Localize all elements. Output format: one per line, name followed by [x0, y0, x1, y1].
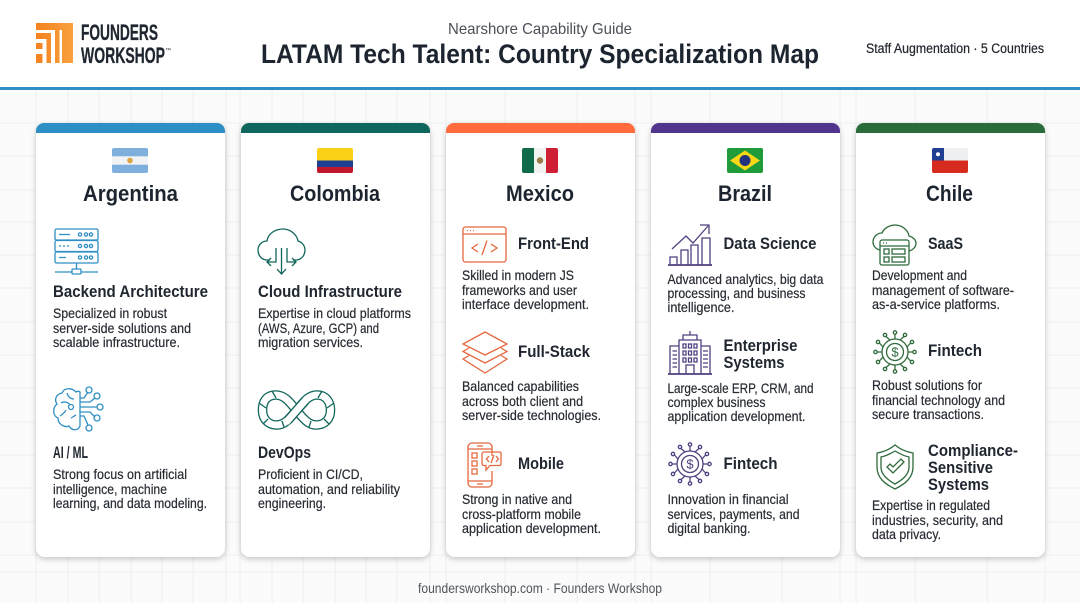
item: SaaS description: as-a-service platforms. — [872, 297, 1000, 312]
item: Cloud Infrastructure: Cloud Infrastructure — [258, 282, 402, 301]
item: Front-End heading: Front-End — [518, 234, 589, 253]
item: Cloud Infrastructure: Expertise in cloud platforms — [258, 306, 411, 321]
item: Fintech description: financial technology and — [872, 393, 1005, 408]
icon: layers — [463, 332, 507, 373]
item: Enterprise Systems description: Large-scale ERP, CRM, and — [668, 381, 814, 396]
item: Compliance description — [872, 498, 1003, 542]
flag: Argentina — [112, 148, 148, 173]
item: Enterprise Systems description — [668, 381, 814, 424]
item: SaaS description: Development and — [872, 268, 967, 283]
card top bar — [36, 123, 225, 133]
item: SaaS heading: SaaS — [928, 234, 963, 253]
logo — [36, 20, 171, 68]
panel: Chile — [856, 123, 1045, 557]
item: AI / ML — [53, 443, 207, 511]
item: Fintech description: Robust solutions for — [872, 378, 982, 393]
country name: Mexico — [506, 181, 574, 206]
item: Front-End description: frameworks and user — [462, 283, 577, 298]
logo wordmark: WORKSHOP — [81, 43, 165, 68]
icon: brain circuit — [54, 387, 103, 431]
item: AI / ML: intelligence, machine — [53, 482, 167, 497]
card top bar — [446, 123, 635, 133]
item: Backend Architecture: scalable infrastructure. — [53, 335, 180, 350]
flag: Brazil — [727, 148, 763, 173]
logo mark — [36, 23, 73, 63]
item: Backend Architecture: Backend Architecture — [53, 282, 208, 301]
eyebrow: Nearshore Capability Guide — [448, 21, 632, 38]
item: Fintech heading: Fintech — [724, 454, 778, 473]
item: Enterprise Systems heading: Enterprise — [724, 336, 798, 355]
item: Cloud Infrastructure: (AWS, Azure, GCP) and — [258, 321, 379, 336]
flag: Mexico — [522, 148, 558, 173]
item: Compliance description: data privacy. — [872, 527, 941, 542]
item: Mobile description: cross-platform mobile — [462, 507, 581, 522]
item: Fintech description: services, payments, and — [668, 507, 800, 522]
card body — [856, 123, 1045, 557]
item: Compliance-Sensitive Systems heading: Systems — [928, 475, 989, 494]
country name: Brazil — [718, 181, 772, 206]
item: AI / ML: Strong focus on artificial — [53, 467, 187, 482]
item: SaaS description: management of software- — [872, 283, 1014, 298]
icon: mobile code — [468, 443, 501, 487]
item: Front-End description: interface development. — [462, 297, 589, 312]
item: Compliance-Sensitive Systems heading: Sensitive — [928, 458, 993, 477]
item: Cloud Infrastructure: migration services. — [258, 335, 363, 350]
item: SaaS description — [872, 268, 1014, 312]
card body — [36, 123, 225, 557]
card body — [241, 123, 430, 557]
item: Full-Stack description: server-side technologies. — [462, 408, 601, 423]
item: Full-Stack description: Balanced capabilities — [462, 379, 579, 394]
item: Fintech heading: Fintech — [928, 341, 982, 360]
icon: shield check — [877, 445, 913, 489]
subtitle right: Staff Augmentation · 5 Countries — [866, 41, 1044, 56]
item: Data Science description: Advanced analytics, big data — [668, 272, 824, 287]
item: Fintech description: Innovation in financial — [668, 492, 788, 507]
logo wordmark: ™ — [165, 47, 171, 54]
card top bar — [241, 123, 430, 133]
icon: fintech coin network: $ — [891, 344, 899, 360]
item: Compliance-Sensitive Systems heading — [928, 441, 1018, 494]
item: Backend Architecture: Specialized in robust — [53, 306, 167, 321]
item: DevOps: engineering. — [258, 496, 326, 511]
icon: fintech coin network — [874, 331, 916, 373]
item: Mobile description: application development. — [462, 521, 601, 536]
item: Full-Stack description: across both client and — [462, 394, 583, 409]
item: Data Science description: intelligence. — [668, 300, 734, 315]
flag: Colombia — [317, 148, 353, 173]
item: DevOps — [258, 443, 400, 511]
icon: office buildings — [668, 331, 712, 374]
item: Fintech description: secure transactions. — [872, 407, 984, 422]
item: Backend Architecture: server-side solutions and — [53, 321, 191, 336]
item: Front-End description — [462, 268, 589, 312]
icon: fintech coin network: $ — [686, 456, 694, 472]
item: AI / ML: learning, and data modeling. — [53, 496, 207, 511]
item: Mobile heading: Mobile — [518, 454, 564, 473]
header bar — [0, 0, 1080, 87]
item: AI / ML: AI / ML — [53, 443, 88, 462]
item: Fintech description — [668, 492, 800, 536]
icon: bar chart arrow — [668, 225, 712, 265]
title: LATAM Tech Talent: Country Specialization Map — [261, 39, 819, 69]
item: Fintech description: digital banking. — [668, 521, 750, 536]
card body — [446, 123, 635, 557]
item: DevOps: automation, and reliability — [258, 482, 400, 497]
item: Enterprise Systems heading: Systems — [724, 353, 784, 372]
flag: Chile — [932, 148, 968, 173]
country name: Chile — [926, 181, 973, 206]
item: DevOps: Proficient in CI/CD, — [258, 467, 363, 482]
panel: Mexico — [446, 123, 635, 557]
country name: Colombia — [290, 181, 381, 206]
item: Enterprise Systems description: application development. — [668, 409, 806, 424]
item: Compliance-Sensitive Systems heading: Compliance- — [928, 441, 1018, 460]
icon: fintech coin network — [669, 443, 711, 485]
item: Data Science description — [668, 272, 824, 315]
icon: browser code — [463, 227, 506, 262]
panel: Argentina — [36, 123, 225, 557]
item: Mobile description: Strong in native and — [462, 492, 572, 507]
item: Full-Stack description — [462, 379, 601, 423]
item: Compliance description: Expertise in regulated — [872, 498, 990, 513]
panel: Colombia — [241, 123, 430, 557]
icon: SaaS cloud window — [873, 225, 916, 265]
item: Mobile description — [462, 492, 601, 536]
item: Compliance description: industries, security, and — [872, 513, 1003, 528]
logo wordmark — [81, 20, 171, 68]
footer: foundersworkshop.com · Founders Workshop — [418, 580, 662, 596]
header rule — [0, 87, 1080, 90]
icon: cloud arrows — [258, 229, 305, 274]
item: Fintech description — [872, 378, 1005, 422]
panel: Brazil — [651, 123, 840, 557]
icon: devops infinity — [259, 391, 334, 427]
card top bar — [651, 123, 840, 133]
icon: server — [55, 229, 98, 274]
item: Cloud Infrastructure — [258, 282, 411, 350]
item: Data Science description: processing, and business — [668, 286, 806, 301]
logo wordmark: FOUNDERS — [81, 20, 158, 45]
item: Enterprise Systems heading — [724, 336, 798, 372]
country name: Argentina — [83, 181, 179, 206]
card body — [651, 123, 840, 557]
item: Front-End description: Skilled in modern JS — [462, 268, 574, 283]
item: Backend Architecture — [53, 282, 208, 350]
item: Enterprise Systems description: complex business — [668, 395, 766, 410]
item: Data Science heading: Data Science — [724, 234, 816, 253]
item: DevOps: DevOps — [258, 443, 311, 462]
card top bar — [856, 123, 1045, 133]
item: Full-Stack heading: Full-Stack — [518, 342, 590, 361]
